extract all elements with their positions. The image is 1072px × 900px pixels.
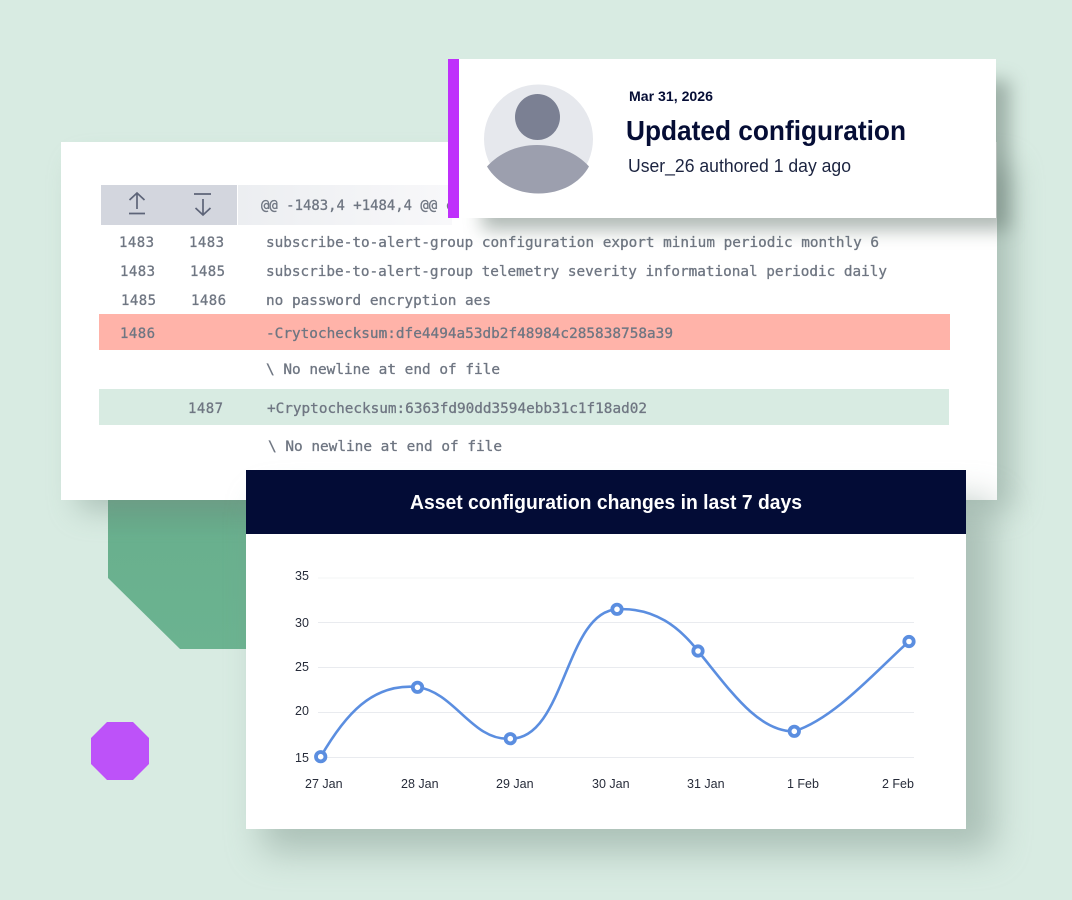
chart header — [246, 470, 966, 534]
x axis labels: 29 Jan — [496, 777, 534, 791]
no newline note 1: \ No newline at end of file — [266, 362, 500, 378]
removed diff line: -Crytochecksum:dfe4494a53db2f48984c285838758a39 — [266, 326, 673, 342]
diff hunk header — [238, 185, 454, 225]
removed diff line — [99, 314, 950, 350]
diff line 2: 1483 — [120, 264, 155, 280]
diff line 1: 1483 — [189, 235, 224, 251]
panel: commit card — [448, 59, 1010, 230]
y axis labels: 35 — [295, 569, 309, 583]
x axis labels: 2 Feb — [882, 777, 914, 791]
diff toolbar: arrow buttons — [101, 185, 237, 225]
x axis labels: 1 Feb — [787, 777, 819, 791]
panel: line chart card — [246, 470, 994, 852]
diff line 2: 1485 — [190, 264, 225, 280]
card title: Updated configuration — [626, 115, 906, 146]
diff line 3 — [121, 293, 491, 309]
panel: code diff — [61, 142, 1013, 510]
diff line 1: 1483 — [119, 235, 154, 251]
diff line 3: no password encryption aes — [266, 293, 491, 309]
y axis labels: 20 — [295, 704, 309, 718]
x axis labels: 30 Jan — [592, 777, 630, 791]
x axis labels: 31 Jan — [687, 777, 725, 791]
purple accent bar — [448, 59, 459, 218]
y axis labels: 30 — [295, 616, 309, 630]
chart header: Asset configuration changes in last 7 days — [410, 492, 802, 514]
added diff line: 1487 — [188, 401, 223, 417]
data line — [321, 609, 909, 757]
decorative green octagon shape — [108, 490, 260, 649]
diff line 3: 1485 — [121, 293, 156, 309]
data points — [316, 605, 914, 761]
y axis labels — [295, 569, 309, 765]
no newline note 2: \ No newline at end of file — [268, 439, 502, 455]
x axis labels: 28 Jan — [401, 777, 439, 791]
icon: arrow up — [129, 193, 145, 214]
y axis labels: 25 — [295, 660, 309, 674]
added diff line: +Cryptochecksum:6363fd90dd3594ebb31c1f18ad02 — [267, 401, 647, 417]
removed diff line: 1486 — [120, 326, 155, 342]
diff hunk header: @@ -1483,4 +1484,4 @@ c — [261, 198, 454, 214]
author line: User_26 authored 1 day ago — [628, 155, 851, 177]
icon: user avatar — [484, 84, 593, 194]
diff line 2: subscribe-to-alert-group telemetry severity informational periodic daily — [266, 264, 887, 280]
x axis labels — [305, 777, 914, 791]
line chart — [295, 569, 914, 791]
date: Mar 31, 2026 — [629, 88, 713, 104]
icon: arrow down — [194, 194, 211, 215]
added diff line — [99, 389, 949, 425]
purple octagon — [91, 722, 149, 780]
diff line 3: 1486 — [191, 293, 226, 309]
y axis labels: 15 — [295, 751, 309, 765]
x axis labels: 27 Jan — [305, 777, 343, 791]
diff line 1: subscribe-to-alert-group configuration export minium periodic monthly 6 — [266, 235, 879, 251]
